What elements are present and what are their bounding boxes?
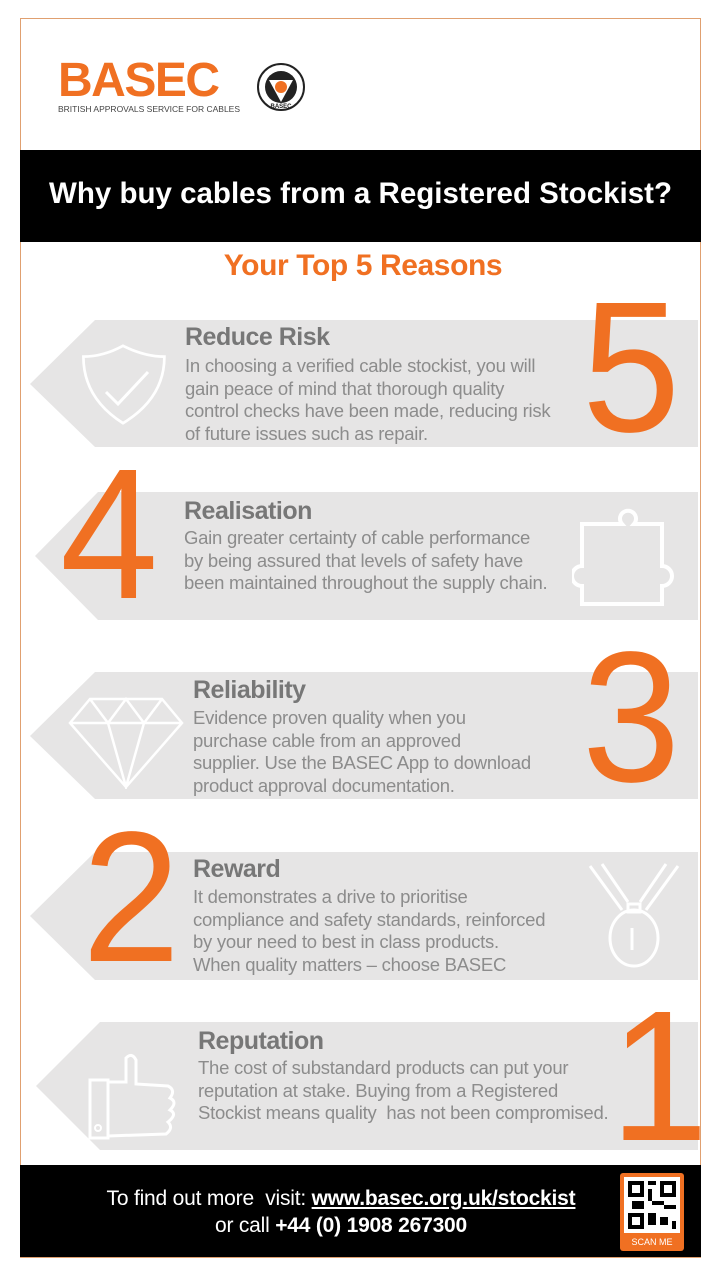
panel: reason 3 reliability	[30, 614, 698, 821]
footer text: or call +44 (0) 1908 267300	[215, 1214, 467, 1237]
logo: BASEC: BASEC	[58, 54, 219, 107]
logo: certification mark	[257, 63, 305, 111]
panel: reason 2 reward: It demonstrates a drive to prioritise	[193, 886, 468, 907]
icon: shield	[82, 344, 166, 424]
icon: puzzle piece	[572, 508, 674, 606]
panel: reason 2 reward: Reward	[193, 855, 280, 883]
panel: reason 3 reliability: Evidence proven quality when you	[193, 707, 466, 728]
panel: reason 5 reduce risk: of future issues such as repair.	[185, 422, 428, 444]
panel: reason 3 reliability: supplier. Use the BASEC App to download	[193, 752, 531, 773]
panel: reason 1 reputation: Reputation	[198, 1027, 324, 1055]
panel: reason 2 reward	[30, 794, 698, 1001]
panel: reason 2 reward: When quality matters – choose BASEC	[193, 954, 506, 974]
panel: reason 5 reduce risk	[30, 264, 698, 471]
panel: reason 1 reputation: reputation at stake. Buying from a Registered	[198, 1080, 558, 1100]
title bar	[20, 150, 701, 242]
panel: reason 5 reduce risk: In choosing a verified cable stockist, you will	[185, 355, 535, 376]
QR code: SCAN ME	[631, 1237, 672, 1247]
number 1: 1	[610, 973, 708, 1180]
logo: certification mark: BASEC	[270, 104, 292, 110]
QR code	[620, 1173, 684, 1251]
panel: reason 5 reduce risk: Reduce Risk	[185, 323, 330, 351]
panel: reason 1 reputation: The cost of substandard products can put your	[198, 1057, 568, 1078]
subtitle: Your Top 5 Reasons	[224, 249, 502, 282]
panel: reason 5 reduce risk: control checks have been made, reducing risk	[185, 400, 550, 421]
number 5: 5	[582, 264, 680, 471]
panel: reason 1 reputation: Stockist means quality has not been compromised.	[198, 1102, 608, 1123]
panel: reason 3 reliability: purchase cable from an approved	[193, 730, 461, 750]
number 2: 2	[82, 794, 180, 1001]
number 4: 4	[60, 431, 158, 638]
panel: reason 3 reliability: product approval documentation.	[193, 774, 455, 796]
icon: thumbs up	[88, 1054, 176, 1140]
footer text	[106, 1187, 576, 1237]
panel: reason 4 realisation	[35, 431, 698, 638]
panel: reason 1 reputation	[36, 973, 708, 1180]
panel: reason 2 reward: compliance and safety standards, reinforced	[193, 908, 545, 930]
icon: diamond	[68, 697, 184, 789]
panel: reason 5 reduce risk: gain peace of mind that thorough quality	[185, 378, 504, 398]
title bar: Why buy cables from a Registered Stockist?	[49, 177, 672, 210]
panel: reason 2 reward: by your need to best in class products.	[193, 931, 499, 952]
panel: reason 4 realisation: by being assured that levels of safety have	[184, 550, 523, 570]
panel: reason 3 reliability: Reliability	[193, 676, 306, 704]
icon: medal	[589, 863, 679, 968]
footer text: To find out more visit: www.basec.org.uk/stockist	[107, 1187, 575, 1210]
panel: reason 4 realisation: been maintained throughout the supply chain.	[184, 572, 547, 593]
panel: reason 4 realisation: Gain greater certainty of cable performance	[184, 527, 530, 548]
footer	[20, 1165, 701, 1257]
panel: reason 4 realisation: Realisation	[184, 497, 312, 525]
number 3: 3	[582, 614, 680, 821]
logo: BASEC: BRITISH APPROVALS SERVICE FOR CABLES	[58, 104, 240, 114]
